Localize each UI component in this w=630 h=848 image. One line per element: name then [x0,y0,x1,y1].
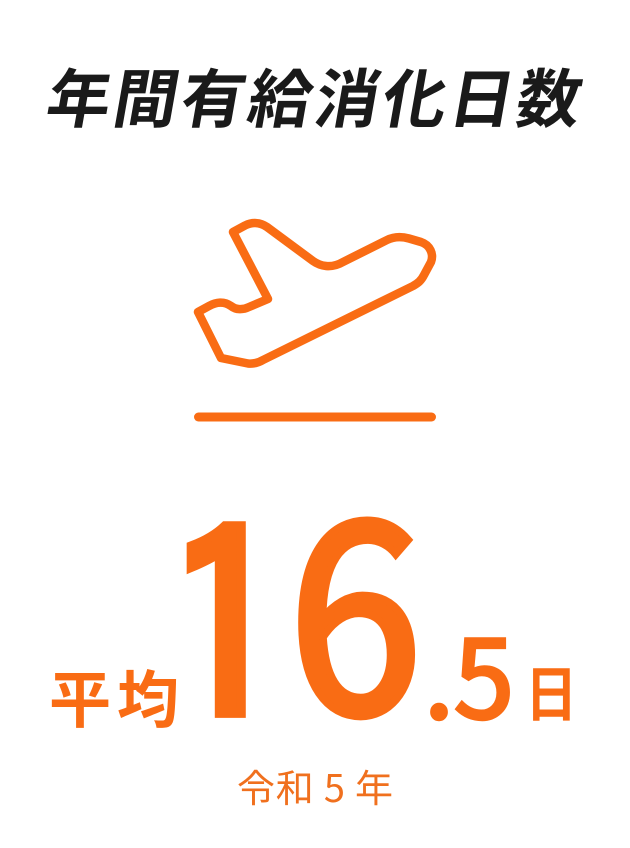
number: 1: 1 [160,492,294,760]
icon: airplane taking off [198,223,432,364]
divider line [194,412,436,422]
number: .5: .5 [424,594,514,750]
caption: Reiwa 5: 令和 5 年 [237,758,393,813]
label: average: 平均 [49,650,179,740]
title: 年間有給消化日数 [40,48,591,141]
number: 6: 6 [288,414,422,788]
unit: day: 日 [525,648,577,734]
